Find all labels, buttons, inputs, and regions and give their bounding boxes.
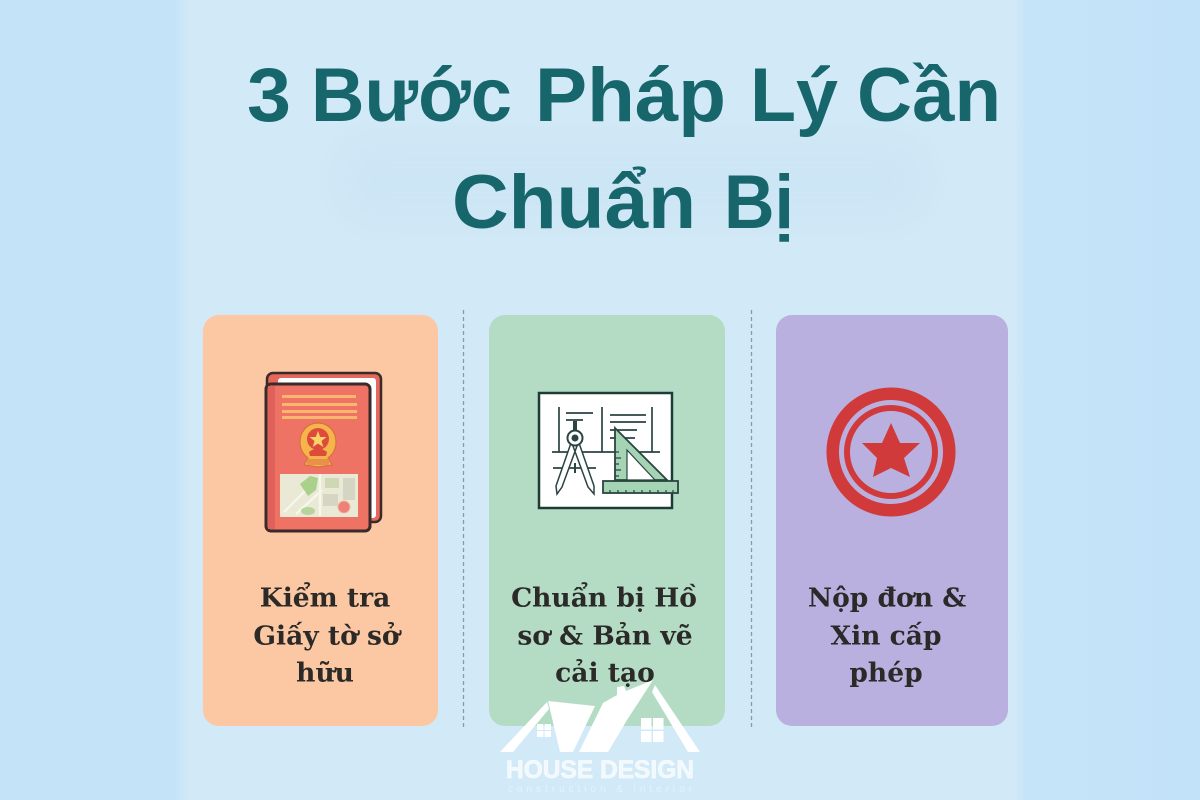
icon: red seal with star — [833, 394, 949, 510]
title backdrop — [335, 135, 930, 225]
logo: House Design: construction & interior — [508, 784, 693, 795]
logo: House Design — [500, 680, 700, 795]
step 1 label: Kiểm tra — [260, 582, 390, 614]
icon: land-title book — [266, 373, 381, 531]
icon: blueprint with compass and set square — [539, 393, 678, 508]
title: Chuẩn — [452, 160, 696, 245]
step 2 label: sơ & Bản vẽ — [517, 620, 693, 652]
step 1 label: hữu — [296, 658, 354, 688]
title: Bước — [311, 53, 512, 138]
title — [247, 53, 1001, 245]
title: Bị — [724, 160, 794, 245]
title: Cần — [857, 53, 1001, 138]
title: 3 — [247, 53, 291, 138]
logo: House Design: HOUSE DESIGN — [506, 756, 694, 784]
step 3 label: phép — [849, 658, 923, 688]
step 1 label: Giấy tờ sở — [253, 620, 402, 652]
panel: step 2 — [489, 315, 725, 726]
step 2 label: cải tạo — [555, 658, 655, 688]
step 3 label: Nộp đơn & — [808, 582, 966, 614]
panel: step 3 — [776, 315, 1008, 726]
step 3 label: Xin cấp — [831, 620, 941, 652]
divider — [462, 310, 464, 730]
title: Lý — [750, 53, 838, 138]
step 2 label: Chuẩn bị Hồ — [511, 582, 697, 614]
divider — [750, 310, 752, 730]
panel: step 1 — [203, 315, 438, 726]
title: Pháp — [535, 53, 726, 138]
